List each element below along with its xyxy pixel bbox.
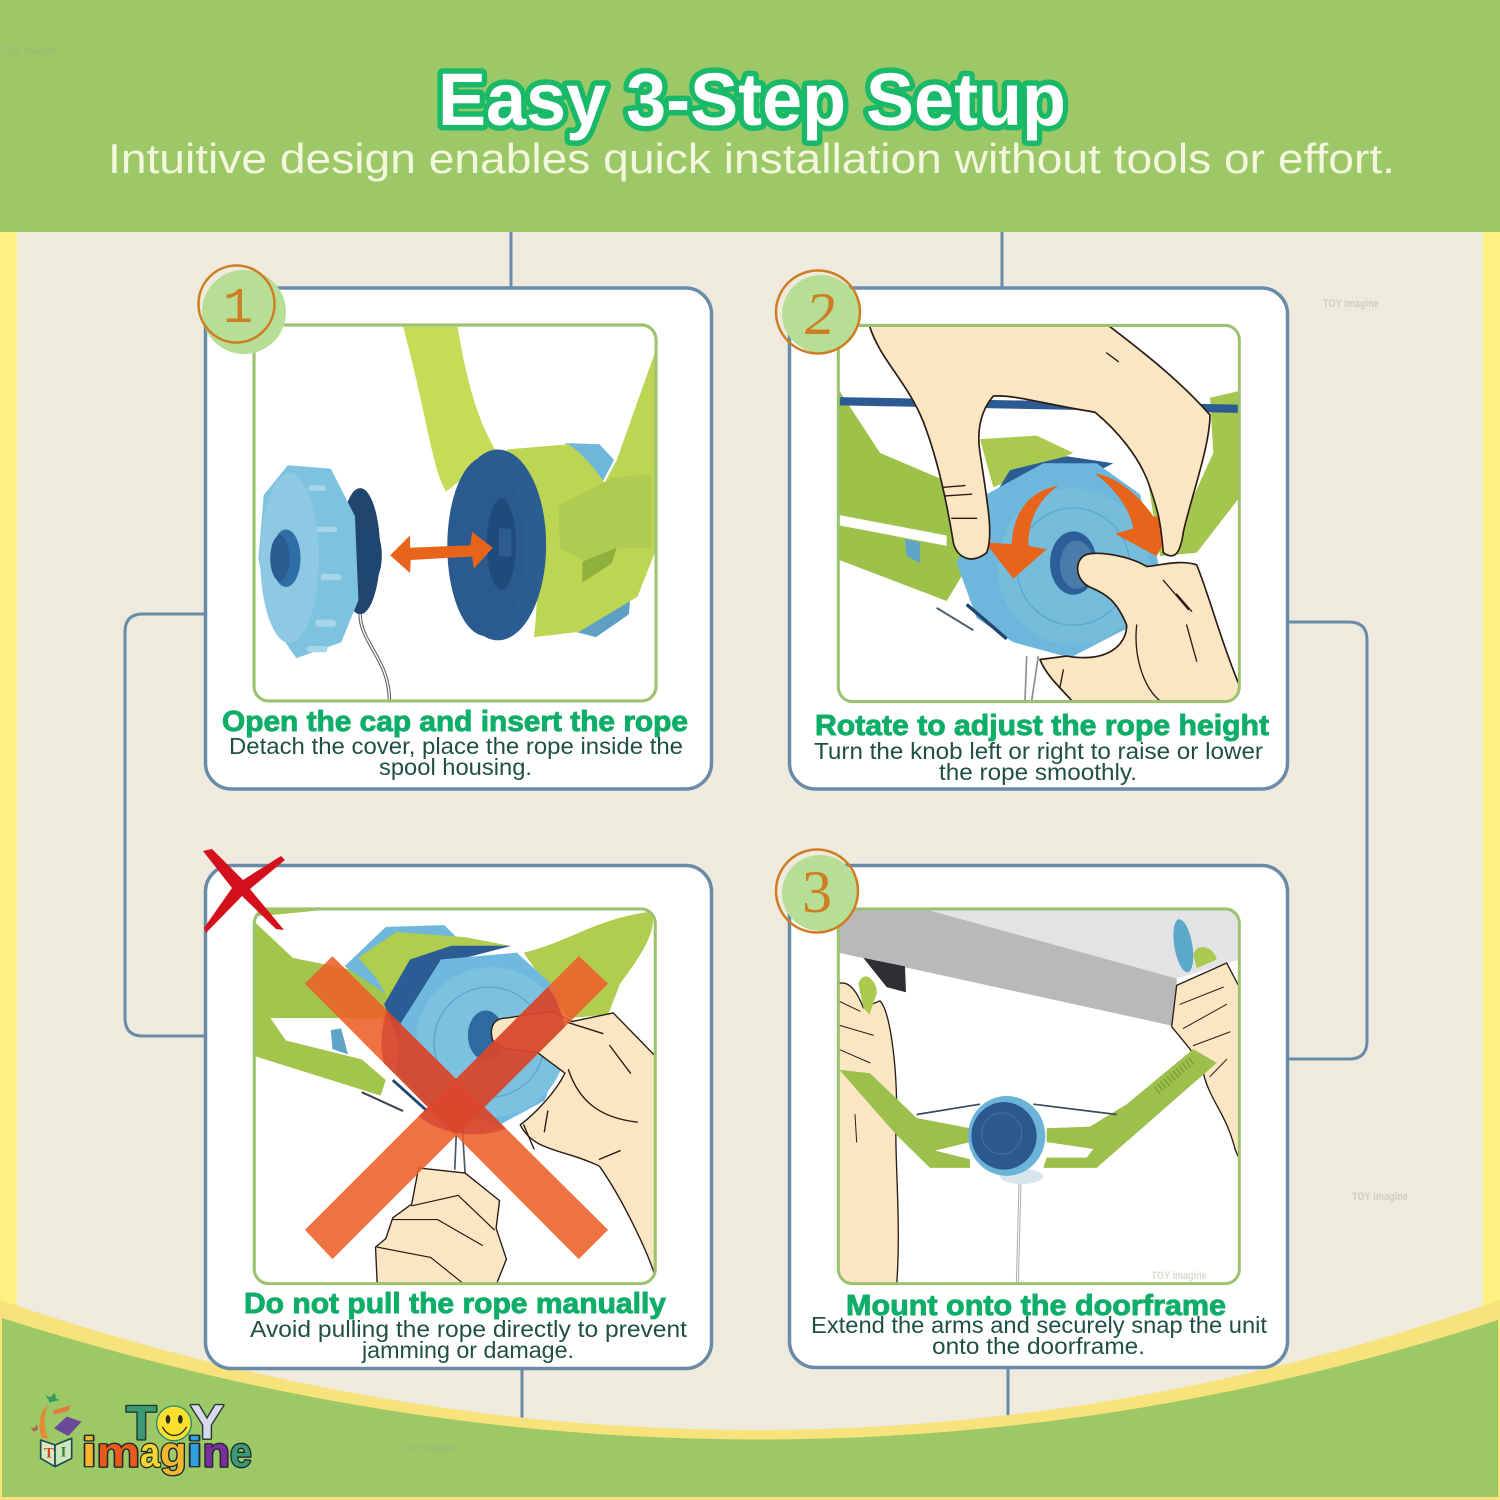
icon: red X mark — [203, 849, 285, 933]
warning description: Avoid pulling the rope directly to prevent — [250, 1316, 688, 1342]
right yellow edge strip — [1483, 232, 1500, 1500]
step 3 description: Extend the arms and securely snap the unit — [811, 1312, 1268, 1338]
watermark bottom: TOY imagine — [403, 1443, 459, 1455]
lower hand — [1040, 553, 1239, 703]
illustration: hand pulling rope crossed out — [254, 909, 655, 1285]
connector lines between cards — [125, 232, 1367, 1430]
logo word: imagine: i — [187, 1429, 203, 1476]
panel: step 1 — [198, 266, 712, 789]
illustration: cap detached from spool — [254, 325, 656, 701]
logo word: TOY: T — [126, 1396, 157, 1450]
green arm assembly — [839, 1070, 970, 1168]
warning description — [250, 1316, 688, 1363]
step 3 description — [811, 1312, 1268, 1359]
logo word: imagine: m — [97, 1429, 140, 1476]
watermark right upper: TOY imagine — [1323, 298, 1379, 310]
logo word: imagine: n — [203, 1429, 230, 1476]
bottom yellow wave band — [0, 1300, 1500, 1500]
watermark in image: TOY imagine — [1152, 1270, 1207, 1282]
red circle tint on cross — [381, 987, 565, 1134]
step 3 description: onto the doorframe. — [932, 1333, 1145, 1359]
logo icon: toy cube with star and pencil: I — [61, 1445, 67, 1461]
title: Easy 3-Step Setup — [438, 58, 1066, 141]
illustration: hands rotating knob — [838, 325, 1239, 703]
grips — [858, 976, 877, 1015]
logo word: imagine: a — [140, 1429, 161, 1476]
rope — [1017, 1183, 1020, 1283]
step 1 description — [229, 733, 683, 780]
step 1 description: Detach the cover, place the rope inside the — [229, 733, 683, 759]
subtitle: Intuitive design enables quick installation without tools or effort. — [108, 135, 1395, 182]
logo word: TOY — [126, 1395, 224, 1450]
step 2 description: the rope smoothly. — [939, 759, 1137, 785]
right hand — [491, 1011, 655, 1276]
step 1 description: spool housing. — [379, 754, 532, 780]
header band — [0, 0, 1500, 232]
center knob — [968, 1096, 1045, 1176]
badge 2 — [776, 270, 860, 354]
badge 1 — [198, 266, 286, 354]
arrow: left rotation — [985, 486, 1058, 579]
badge 3: 3 — [802, 859, 832, 925]
step 1 heading: Open the cap and insert the rope — [222, 706, 688, 738]
upper hand — [869, 325, 1210, 559]
step 2 heading: Rotate to adjust the rope height — [815, 710, 1269, 742]
panel: step 2 — [776, 270, 1288, 789]
logo word: TOY: Y — [190, 1395, 224, 1449]
logo icon: toy cube with star and pencil — [31, 1393, 82, 1467]
badge 3 — [776, 850, 858, 932]
right forearm and hand — [1172, 963, 1239, 1159]
step 3 heading: Mount onto the doorframe — [846, 1290, 1226, 1322]
logo word: imagine: i — [82, 1429, 97, 1476]
logo word: imagine: e — [230, 1429, 252, 1476]
logo word: imagine: g — [160, 1429, 187, 1476]
badge 1: 1 — [223, 281, 253, 338]
large orange cross — [305, 956, 608, 1259]
arrow: right rotation — [1095, 474, 1162, 556]
panel: do not pull warning — [203, 849, 712, 1368]
badge 2: 2 — [805, 281, 835, 347]
panel: step 3 — [776, 850, 1288, 1368]
watermark top left: TOY imagine — [3, 45, 57, 57]
left yellow edge strip — [0, 232, 17, 1500]
warning description: jamming or damage. — [361, 1337, 574, 1363]
logo smiley — [157, 1406, 191, 1441]
step 2 description — [814, 738, 1263, 785]
watermark right lower: TOY imagine — [1352, 1191, 1408, 1203]
step 2 description: Turn the knob left or right to raise or lower — [814, 738, 1263, 764]
lower fist holding rope — [376, 1168, 506, 1285]
left forearm and hand — [838, 983, 898, 1285]
logo icon: toy cube with star and pencil: T — [44, 1445, 54, 1461]
logo word: imagine — [82, 1429, 252, 1476]
warning heading: Do not pull the rope manually — [244, 1288, 666, 1320]
illustration: mounting on doorframe — [838, 909, 1239, 1285]
logo: Toy Imagine — [31, 1393, 252, 1476]
bottom green wave — [2, 1318, 1498, 1497]
arrow: double-headed orange — [390, 532, 493, 573]
